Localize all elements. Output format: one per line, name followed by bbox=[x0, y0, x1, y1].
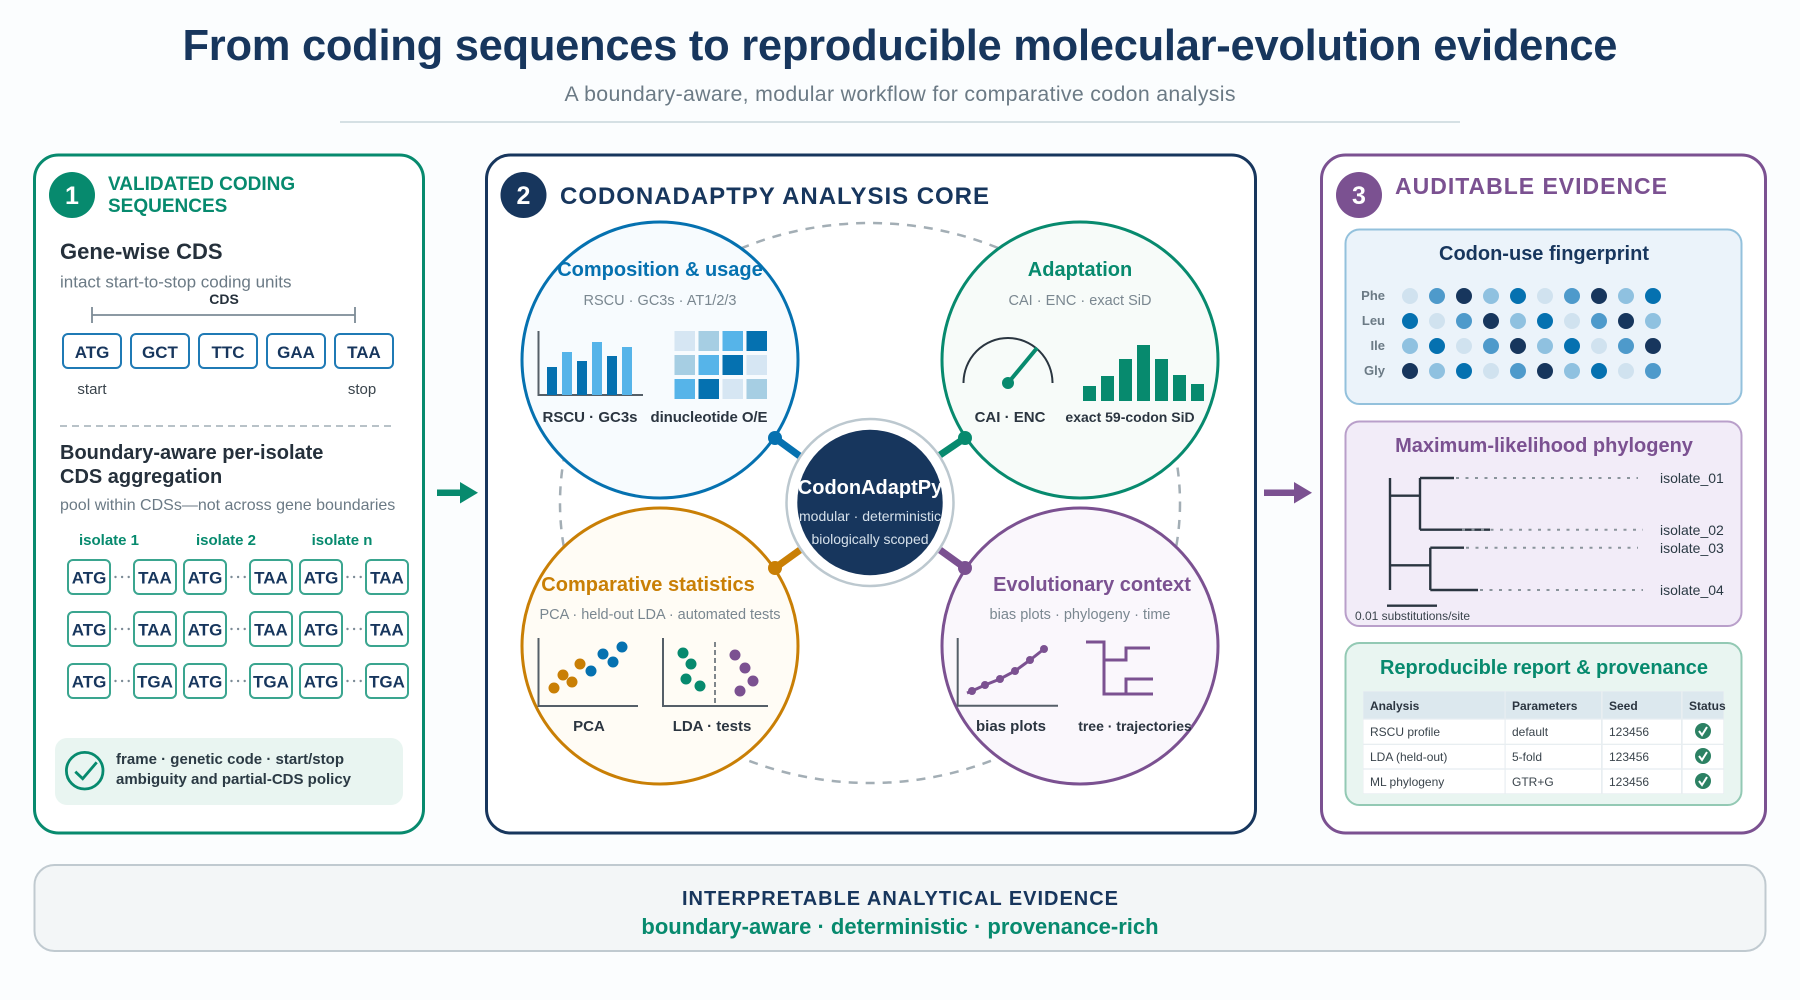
isolate codon grid bbox=[68, 560, 408, 698]
isolate codon grid: TAA bbox=[254, 620, 288, 640]
status checks bbox=[1695, 723, 1711, 789]
badge 3 bbox=[1336, 172, 1382, 218]
CDS bracket bbox=[92, 291, 355, 323]
callout text: ambiguity and partial-CDS policy bbox=[116, 771, 352, 788]
comparative subtitle: PCA · held-out LDA · automated tests bbox=[540, 607, 780, 623]
fingerprint row labels bbox=[1361, 288, 1386, 378]
composition chart labels: RSCU · GC3s bbox=[542, 409, 638, 426]
isolate codon grid: TGA bbox=[253, 672, 289, 692]
codon labels: TAA bbox=[347, 343, 381, 362]
banner tagline: boundary-aware · deterministic · provenance-rich bbox=[641, 914, 1159, 939]
module: evolutionary context bbox=[942, 508, 1218, 784]
hub title: CodonAdaptPy bbox=[798, 477, 943, 499]
provenance table: 123456 bbox=[1609, 725, 1649, 739]
provenance table: RSCU profile bbox=[1370, 725, 1440, 739]
isolate labels: isolate_03 bbox=[1660, 540, 1724, 556]
isolate codon grid: ATG bbox=[72, 568, 106, 588]
isolate labels: isolate 1 bbox=[79, 532, 139, 549]
start and stop labels bbox=[77, 381, 376, 398]
isolate labels: isolate 2 bbox=[196, 532, 256, 549]
evolutionary chart labels: tree · trajectories bbox=[1078, 718, 1192, 734]
codon labels: TTC bbox=[211, 343, 245, 362]
LDA scatter bbox=[663, 638, 768, 706]
isolate codon grid: ATG bbox=[188, 568, 222, 588]
isolate codon grid: TAA bbox=[254, 568, 288, 588]
fingerprint row labels: Gly bbox=[1364, 363, 1386, 378]
composition chart labels: dinucleotide O/E bbox=[650, 409, 768, 426]
card: reproducible report bbox=[1346, 643, 1742, 805]
SiD bar chart bbox=[1083, 345, 1204, 401]
panel 2 heading: CODONADAPTPY ANALYSIS CORE bbox=[560, 183, 989, 210]
module: comparative statistics bbox=[522, 508, 798, 784]
phylogenetic tree bbox=[1390, 478, 1490, 590]
boundary-aware description: pool within CDSs—not across gene boundaries bbox=[60, 497, 395, 514]
phylogeny title: Maximum-likelihood phylogeny bbox=[1395, 435, 1694, 457]
hub caption bbox=[799, 508, 941, 547]
isolate codon grid: ATG bbox=[72, 620, 106, 640]
icon: check circle bbox=[66, 752, 103, 789]
arrow: panel 2 to 3 bbox=[1264, 482, 1312, 504]
panel: auditable evidence bbox=[1322, 155, 1766, 833]
arrow: panel 1 to 2 bbox=[437, 482, 478, 504]
adaptation chart labels: CAI · ENC bbox=[975, 409, 1046, 426]
provenance table: 123456 bbox=[1609, 775, 1649, 789]
gene-wise heading: Gene-wise CDS bbox=[60, 239, 223, 264]
bar chart bbox=[538, 331, 643, 395]
adaptation chart labels: exact 59-codon SiD bbox=[1065, 409, 1195, 425]
fingerprint title: Codon-use fingerprint bbox=[1439, 243, 1649, 265]
evolutionary subtitle: bias plots · phylogeny · time bbox=[990, 607, 1170, 623]
callout text: frame · genetic code · start/stop bbox=[116, 751, 344, 768]
provenance table: 123456 bbox=[1609, 750, 1649, 764]
composition subtitle: RSCU · GC3s · AT1/2/3 bbox=[584, 293, 736, 309]
provenance table: default bbox=[1512, 725, 1549, 739]
provenance table: Parameters bbox=[1512, 699, 1578, 713]
isolate codon grid: TGA bbox=[369, 672, 405, 692]
provenance table bbox=[1363, 691, 1726, 794]
provenance table: LDA (held-out) bbox=[1370, 750, 1447, 764]
start and stop labels: start bbox=[77, 381, 107, 398]
hub caption: biologically scoped bbox=[812, 531, 928, 547]
codon labels: ATG bbox=[75, 343, 109, 362]
badge 2: 2 bbox=[517, 182, 530, 210]
provenance table: ML phylogeny bbox=[1370, 775, 1444, 789]
badge 1 bbox=[49, 172, 95, 218]
validation callout bbox=[55, 738, 403, 805]
comparative title: Comparative statistics bbox=[541, 574, 755, 596]
isolate codon grid: ATG bbox=[72, 672, 106, 692]
boundary-aware heading: Boundary-aware per-isolate bbox=[60, 442, 323, 464]
provenance table: Status bbox=[1689, 699, 1726, 713]
composition chart labels bbox=[542, 409, 768, 426]
panel 3 heading: AUDITABLE EVIDENCE bbox=[1395, 173, 1667, 199]
title: From coding sequences to reproducible molecular-evolution evidence bbox=[182, 22, 1618, 70]
module: composition and usage bbox=[522, 222, 798, 498]
isolate labels: isolate_01 bbox=[1660, 470, 1724, 486]
comparative chart labels: PCA bbox=[573, 718, 605, 735]
gauge bbox=[964, 338, 1052, 389]
isolate codon grid: TAA bbox=[138, 568, 172, 588]
adaptation title: Adaptation bbox=[1028, 259, 1132, 281]
tree icon bbox=[1086, 642, 1153, 694]
boundary-aware heading: CDS aggregation bbox=[60, 466, 222, 488]
hub caption: modular · deterministic bbox=[799, 508, 941, 524]
isolate codon grid: ATG bbox=[304, 568, 338, 588]
evolutionary title: Evolutionary context bbox=[993, 574, 1191, 596]
PCA scatter bbox=[538, 638, 638, 706]
provenance table: GTR+G bbox=[1512, 775, 1554, 789]
isolate labels: isolate_04 bbox=[1660, 582, 1724, 598]
comparative chart labels: LDA · tests bbox=[673, 718, 751, 735]
isolate labels: isolate_02 bbox=[1660, 522, 1724, 538]
codon labels bbox=[75, 343, 381, 362]
central hub bbox=[786, 419, 954, 586]
banner headline: INTERPRETABLE ANALYTICAL EVIDENCE bbox=[682, 888, 1118, 910]
badge 3: 3 bbox=[1352, 182, 1366, 210]
connectors bbox=[768, 431, 972, 575]
scale bar: 0.01 substitutions/site bbox=[1355, 609, 1470, 623]
fingerprint row labels: Ile bbox=[1371, 338, 1385, 353]
fingerprint row labels: Phe bbox=[1361, 288, 1385, 303]
dot matrix bbox=[1402, 288, 1661, 379]
footer banner bbox=[34, 865, 1766, 951]
isolate labels bbox=[1660, 470, 1724, 598]
adaptation subtitle: CAI · ENC · exact SiD bbox=[1008, 293, 1152, 309]
fingerprint row labels: Leu bbox=[1362, 313, 1385, 328]
provenance table: 5-fold bbox=[1512, 750, 1542, 764]
isolate labels bbox=[79, 532, 372, 549]
evolutionary chart labels: bias plots bbox=[976, 718, 1046, 735]
isolate codon grid: ATG bbox=[304, 672, 338, 692]
composition title: Composition & usage bbox=[557, 259, 763, 281]
isolate codon grid: TAA bbox=[370, 620, 404, 640]
start and stop labels: stop bbox=[348, 381, 376, 398]
codon labels: GCT bbox=[142, 343, 179, 362]
dotted leader lines bbox=[1456, 478, 1643, 590]
badge 1: 1 bbox=[65, 182, 79, 210]
report title: Reproducible report & provenance bbox=[1380, 657, 1708, 679]
evolutionary chart labels bbox=[976, 718, 1192, 735]
isolate codon grid: ATG bbox=[304, 620, 338, 640]
CDS bracket: CDS bbox=[209, 291, 239, 307]
bias line plot bbox=[958, 638, 1058, 706]
panel 1 heading: SEQUENCES bbox=[108, 196, 227, 217]
isolate codon grid: TAA bbox=[138, 620, 172, 640]
provenance table: Analysis bbox=[1370, 699, 1420, 713]
adaptation chart labels bbox=[975, 409, 1195, 426]
isolate labels: isolate n bbox=[312, 532, 372, 549]
heatmap bbox=[674, 331, 767, 399]
codon labels: GAA bbox=[277, 343, 315, 362]
gene-wise description: intact start-to-stop coding units bbox=[60, 272, 292, 292]
badge 2 bbox=[500, 172, 546, 218]
isolate codon grid: ATG bbox=[188, 620, 222, 640]
module: adaptation bbox=[942, 222, 1218, 498]
isolate codon grid: TAA bbox=[370, 568, 404, 588]
panel: validated coding sequences bbox=[34, 155, 424, 833]
codon strip bbox=[63, 334, 393, 368]
subtitle: A boundary-aware, modular workflow for comparative codon analysis bbox=[564, 82, 1236, 106]
isolate codon grid: ATG bbox=[188, 672, 222, 692]
panel 1 heading: VALIDATED CODING bbox=[108, 174, 295, 195]
card: maximum-likelihood phylogeny bbox=[1346, 422, 1742, 626]
card: codon-use fingerprint bbox=[1346, 230, 1742, 404]
comparative chart labels bbox=[573, 718, 751, 735]
provenance table: Seed bbox=[1609, 699, 1638, 713]
panel: analysis core bbox=[486, 155, 1256, 833]
isolate codon grid: TGA bbox=[137, 672, 173, 692]
